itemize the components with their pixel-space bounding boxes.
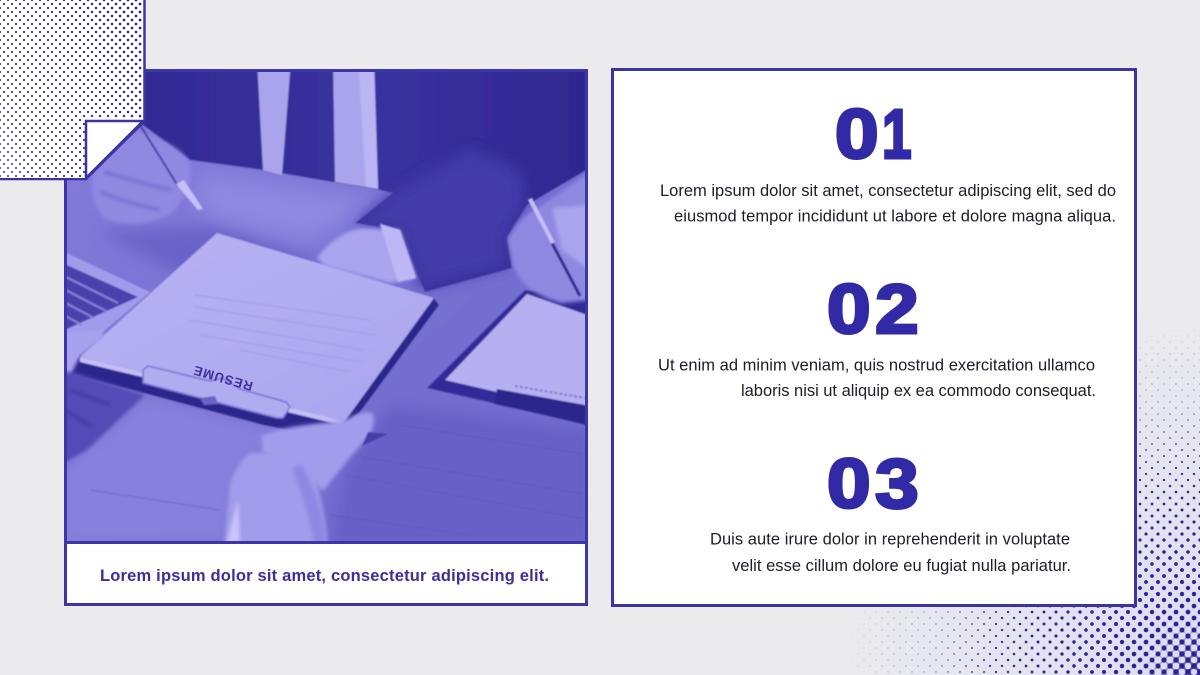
item 03 bbox=[710, 444, 1071, 575]
holding hand bottom right bbox=[262, 412, 374, 491]
number 02: 02 bbox=[827, 270, 923, 348]
item 01 text: Lorem ipsum dolor sit amet, consectetur adipiscing elit, sed do bbox=[660, 182, 1116, 200]
table shadow bbox=[100, 226, 320, 285]
item 02 text: laboris nisi ut aliquip ex ea commodo consequat. bbox=[741, 382, 1096, 400]
number 01: 0 bbox=[835, 95, 879, 173]
halftone pattern: bottom right corner bbox=[840, 318, 1200, 675]
number 01: 1 bbox=[882, 96, 912, 174]
darker wood lower right bbox=[330, 405, 590, 545]
right hand with pen bbox=[508, 172, 590, 303]
right clipboard bbox=[427, 290, 590, 426]
divider and caption band bbox=[67, 541, 585, 603]
item 03 text bbox=[710, 530, 1071, 575]
suit bbox=[60, 60, 595, 292]
item 03 text: Duis aute irure dolor in reprehenderit in voluptate bbox=[710, 530, 1070, 548]
item 03 text: velit esse cillum dolore eu fugiat nulla pariatur. bbox=[732, 557, 1071, 575]
photo: handing over a resume on a clipboard bbox=[67, 72, 585, 541]
item 01 text: eiusmod tempor incididunt ut labore et dolore magna aliqua. bbox=[674, 208, 1116, 226]
number 01 bbox=[835, 95, 912, 174]
table top light area bbox=[195, 170, 385, 245]
holding hand left bbox=[60, 331, 104, 372]
folded corner bbox=[84, 120, 144, 181]
panel: photo with caption bbox=[64, 69, 588, 606]
item 01 bbox=[660, 95, 1116, 226]
halftone background tint: bottom right bbox=[840, 300, 1200, 675]
item 02 text: Ut enim ad minim veniam, quis nostrud exercitation ullamco bbox=[658, 356, 1095, 374]
item 02 bbox=[658, 270, 1096, 400]
caption text: Lorem ipsum dolor sit amet, consectetur adipiscing elit. bbox=[100, 567, 549, 585]
center cuff hand bbox=[317, 228, 416, 283]
main clipboard board bbox=[72, 297, 439, 433]
corner note: halftone with folded corner bbox=[0, 0, 146, 181]
main clipboard paper bbox=[80, 233, 434, 421]
item 01 text bbox=[660, 182, 1116, 226]
number 03: 03 bbox=[827, 444, 923, 523]
clip bbox=[143, 366, 290, 418]
note outline bbox=[0, 0, 146, 180]
halftone dots in note bbox=[0, 0, 142, 178]
item 02 text bbox=[658, 356, 1096, 400]
resume label on clipboard: RESUME bbox=[191, 363, 254, 394]
laptop bbox=[60, 250, 150, 345]
left hand with pen bbox=[92, 132, 190, 224]
shirt stripes bbox=[257, 60, 291, 175]
panel: numbered list bbox=[611, 68, 1137, 607]
